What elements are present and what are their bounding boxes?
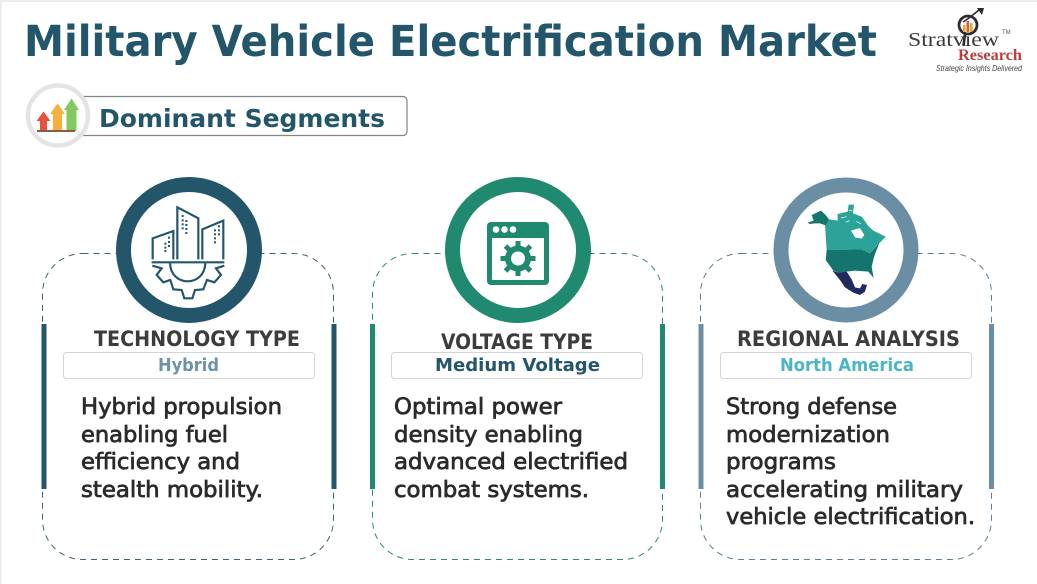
label: technology type: TECHNOLOGY TYPE xyxy=(94,327,300,351)
description: medium voltage: Optimal power xyxy=(394,395,563,420)
description: medium voltage: combat systems. xyxy=(394,478,589,503)
logo: Stratview Research: TM xyxy=(1002,30,1011,36)
sub-label box: Medium Voltage: Medium Voltage xyxy=(435,355,600,376)
icon: rising arrows xyxy=(28,86,88,146)
description: north america: programs xyxy=(726,450,836,475)
logo: Stratview Research: Stratview xyxy=(908,29,1000,51)
section heading: Dominant Segments xyxy=(28,86,407,146)
sub-label box: North America: North America xyxy=(780,355,914,376)
panel: voltage type xyxy=(370,184,665,560)
description: hybrid: enabling fuel xyxy=(81,423,228,448)
description: hybrid: stealth mobility. xyxy=(81,478,263,503)
icon: window with gear xyxy=(452,184,584,316)
sub-label box: Medium Voltage xyxy=(392,352,642,378)
panel: regional analysis xyxy=(698,185,994,560)
label: regional analysis: REGIONAL ANALYSIS xyxy=(737,327,960,351)
icon: buildings on gear xyxy=(124,184,254,316)
logo: Stratview Research: Strategic Insights Delivered xyxy=(936,64,1022,73)
description: north america: vehicle electrification. xyxy=(726,505,975,530)
logo: Stratview Research: Research xyxy=(958,47,1022,64)
description: north america: accelerating military xyxy=(726,478,963,503)
description: medium voltage: advanced electrified xyxy=(394,450,628,475)
sub-label box: Hybrid: Hybrid xyxy=(158,355,219,376)
description: hybrid: efficiency and xyxy=(81,450,240,475)
description: north america: modernization xyxy=(726,423,890,448)
description: north america xyxy=(726,395,975,530)
section heading: Dominant Segments: Dominant Segments xyxy=(99,104,385,133)
description: medium voltage: density enabling xyxy=(394,423,583,448)
description: hybrid: Hybrid propulsion xyxy=(81,395,282,420)
sub-label box: Hybrid xyxy=(64,352,314,378)
panel: technology type xyxy=(42,184,336,560)
logo: Stratview Research xyxy=(908,8,1022,73)
label: voltage type: VOLTAGE TYPE xyxy=(441,330,593,354)
description: north america: Strong defense xyxy=(726,395,897,420)
title: Military Vehicle Electrification Market xyxy=(24,17,877,67)
sub-label box: North America xyxy=(720,352,972,378)
description: medium voltage xyxy=(394,395,628,503)
description: hybrid xyxy=(81,395,282,503)
icon: North America map xyxy=(781,185,911,315)
